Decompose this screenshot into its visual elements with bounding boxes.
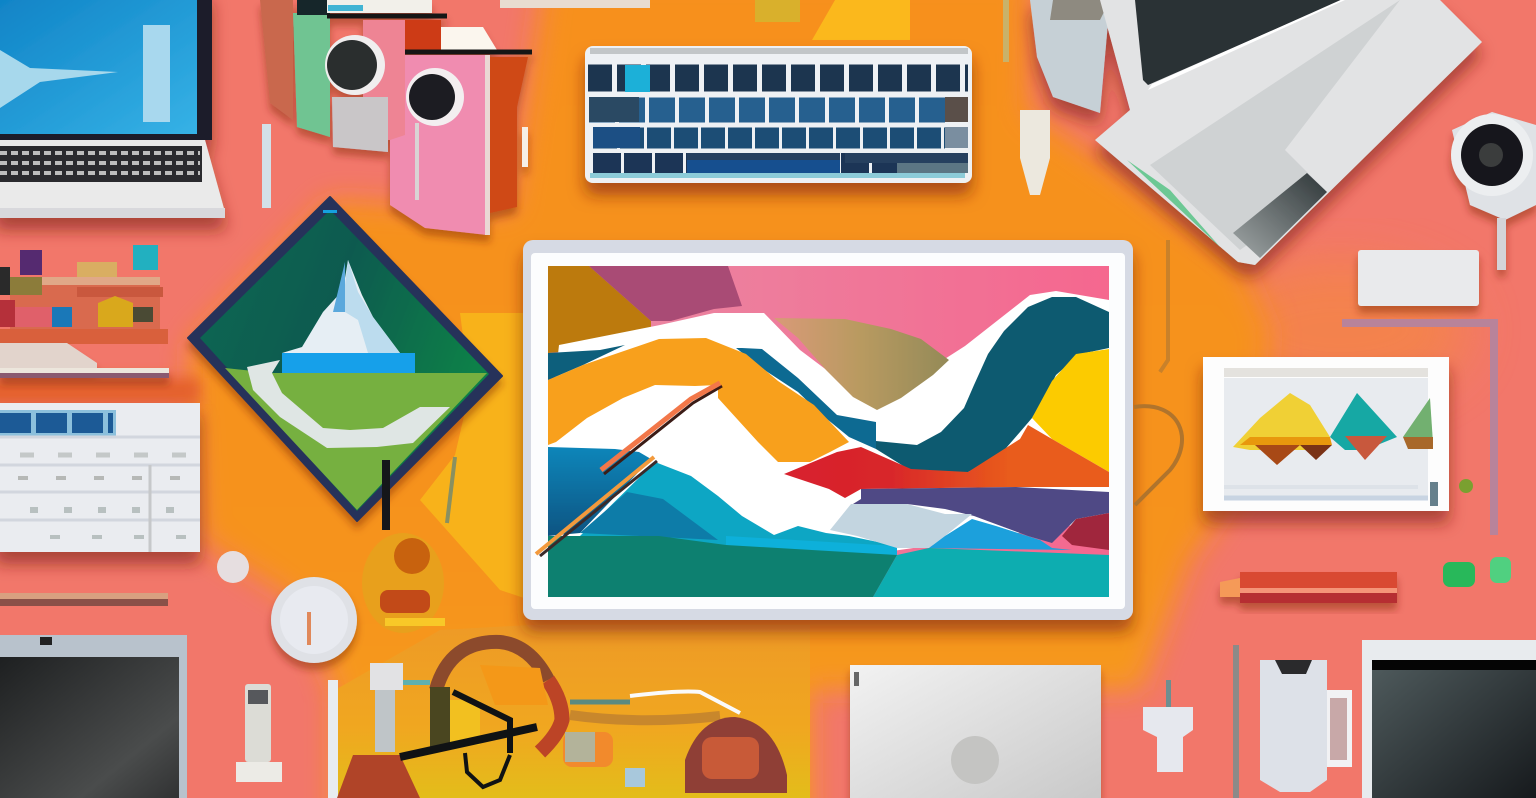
icon: yellow cable top	[1003, 0, 1009, 62]
icon: usb stick	[236, 684, 282, 782]
icon: pendant cable black	[382, 460, 390, 530]
icon: white bulb	[1143, 680, 1193, 772]
icon: second stylus	[536, 457, 657, 556]
icon: brown pouch	[685, 717, 787, 793]
icon: small disc	[217, 551, 249, 583]
icon: orange ring	[362, 533, 445, 633]
panel: white keyboard left	[0, 403, 200, 552]
icon: red strips right	[1220, 572, 1397, 603]
icon: pen right	[1342, 319, 1498, 535]
background: yellow top patch	[812, 0, 910, 40]
icon: vertical cable	[1160, 240, 1168, 372]
panel: bottom-left monitor	[0, 635, 187, 798]
panel: top-left laptop	[0, 0, 225, 218]
panel: bottom-right monitor	[1362, 640, 1536, 798]
icon: small white dongle	[1020, 110, 1050, 195]
icon: cable loop	[1134, 406, 1182, 505]
panel: chart card right	[1203, 357, 1449, 511]
icon: green dots	[1443, 479, 1511, 587]
icon: white power block	[1358, 250, 1479, 306]
artwork: green hill	[225, 368, 487, 510]
icon: round gauge	[271, 577, 357, 663]
icon: wedge device left	[0, 343, 169, 378]
icon: small square	[625, 768, 645, 787]
background: shaded band left	[0, 378, 200, 404]
icon: white strip at top	[500, 0, 650, 8]
icon: thin rod	[1233, 645, 1239, 798]
icon: small earbud	[563, 732, 613, 767]
background: orange central shape	[190, 0, 1270, 798]
icon: glasses and headphone band	[400, 642, 740, 787]
icon: thin cable	[447, 457, 455, 523]
panel: desk items left	[0, 245, 168, 344]
icon: pen top left	[262, 124, 271, 208]
panel: main tablet	[523, 240, 1133, 620]
icon: stylus	[601, 383, 722, 474]
background: yellow patch behind tablet	[420, 313, 530, 600]
icon: thin stick	[328, 680, 338, 798]
panel: diamond tablet	[188, 197, 502, 521]
panel: top cameras	[260, 0, 532, 235]
panel: top centre keyboard	[585, 46, 972, 183]
icon: strip left	[0, 593, 168, 606]
icon: white connector	[337, 663, 430, 798]
artwork: mountain	[282, 260, 400, 353]
panel: top right laptop	[1030, 0, 1482, 265]
artwork: colourful landscape	[548, 266, 1109, 597]
panel: bottom centre device	[850, 665, 1101, 798]
artwork: white curve	[247, 360, 450, 448]
icon: small yellow object at top	[755, 0, 800, 22]
icon: webcam top right	[1451, 112, 1536, 270]
icon: speck at top of tablet	[323, 210, 337, 213]
icon: white jug	[1260, 660, 1352, 792]
background: yellow lower area	[335, 625, 810, 798]
artwork: water	[282, 353, 415, 373]
chart: mountain peaks	[1233, 393, 1433, 465]
background: soft orange glow right	[1210, 260, 1470, 400]
